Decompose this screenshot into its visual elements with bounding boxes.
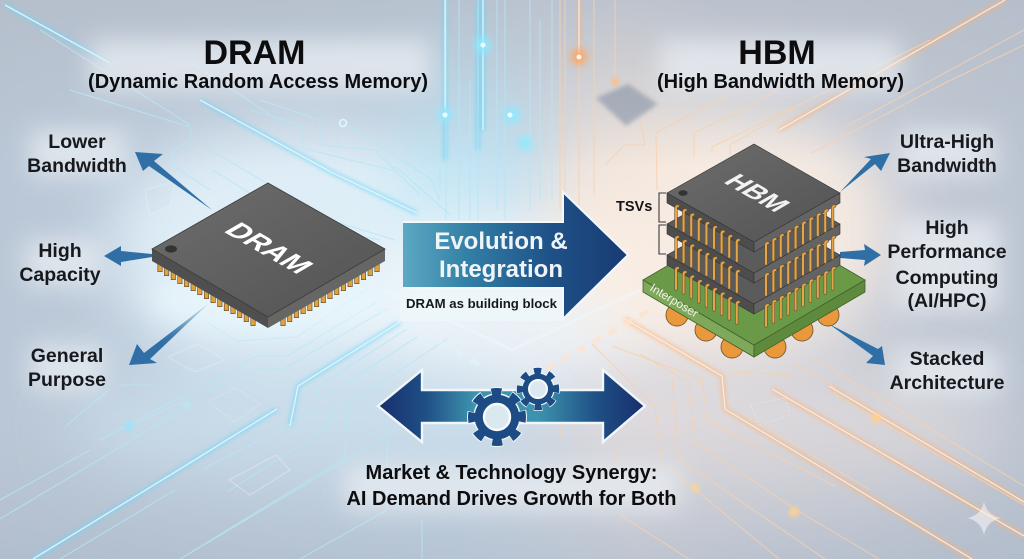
icon: watermark sparkle xyxy=(967,501,1001,535)
synergy caption: Market & Technology Synergy: xyxy=(366,462,657,484)
title: HBM xyxy=(657,34,904,93)
HBM stack xyxy=(643,144,865,358)
TSVs label with brackets xyxy=(616,193,666,254)
labels: DRAM features: High xyxy=(38,240,82,262)
layer 3 xyxy=(667,206,840,314)
labels: DRAM features: General xyxy=(31,345,103,367)
synergy caption xyxy=(346,462,677,510)
chip pins xyxy=(160,264,377,326)
caption: DRAM as building block xyxy=(406,296,558,311)
bright cores, blue xyxy=(5,0,483,559)
labels: HBM features: Bandwidth xyxy=(897,155,997,177)
labels: HBM features: Performance xyxy=(887,241,1007,263)
chip label: DRAM xyxy=(217,219,320,278)
icon: small gear xyxy=(520,372,556,406)
labels: DRAM features: Purpose xyxy=(28,369,106,391)
labels: HBM features: High xyxy=(925,217,969,239)
labels: HBM features: Computing xyxy=(896,267,998,289)
arrow: high capacity xyxy=(104,246,152,266)
main arrow: Evolution & Integration xyxy=(400,192,628,321)
arrow: high performance computing xyxy=(840,244,881,266)
title: HBM: (High Bandwidth Memory) xyxy=(657,71,904,93)
main arrow: Evolution & Integration: Integration xyxy=(439,256,563,283)
solder balls xyxy=(666,304,839,358)
pad rows xyxy=(361,290,652,369)
circuit glow, orange xyxy=(579,0,1024,559)
circuit traces, orange xyxy=(560,0,1024,559)
arrow: lower bandwidth xyxy=(135,152,212,210)
labels: DRAM features: Lower xyxy=(48,131,106,153)
labels: HBM features: Ultra-High xyxy=(900,131,994,153)
HBM chip label: HBM xyxy=(717,170,797,216)
bright cores, orange xyxy=(579,0,1024,559)
title: HBM: HBM xyxy=(738,34,816,72)
labels: DRAM features: Bandwidth xyxy=(27,155,127,177)
arrow: general purpose xyxy=(129,304,208,365)
labels: DRAM features: Capacity xyxy=(19,264,101,286)
icon: large gear xyxy=(472,392,522,442)
arrow: stacked architecture xyxy=(829,324,885,365)
labels: DRAM features xyxy=(19,131,127,391)
layer 2 xyxy=(667,175,840,283)
title: DRAM: (Dynamic Random Access Memory) xyxy=(88,71,428,93)
title: DRAM xyxy=(88,34,428,93)
background chip, upper centre xyxy=(596,84,658,126)
labels: HBM features: (AI/HPC) xyxy=(907,290,987,312)
circuit glow, blue xyxy=(5,0,483,559)
interposer xyxy=(643,215,865,357)
HBM stack: Interposer xyxy=(647,281,701,320)
circuit traces, blue xyxy=(0,0,552,559)
main arrow: Evolution & Integration: Evolution & xyxy=(434,228,568,255)
DRAM chip xyxy=(148,183,388,335)
synergy double arrow xyxy=(378,370,645,442)
arrow: ultra-high bandwidth xyxy=(840,153,890,192)
labels: HBM features: Architecture xyxy=(890,372,1005,394)
synergy caption: AI Demand Drives Growth for Both xyxy=(346,488,677,510)
glow nodes xyxy=(124,37,881,517)
title: DRAM: DRAM xyxy=(204,34,305,72)
faint background chips xyxy=(145,182,790,495)
labels: HBM features xyxy=(887,131,1007,394)
TSVs label with brackets: TSVs xyxy=(616,199,652,215)
labels: HBM features: Stacked xyxy=(910,348,984,370)
layer 1 xyxy=(667,144,840,252)
